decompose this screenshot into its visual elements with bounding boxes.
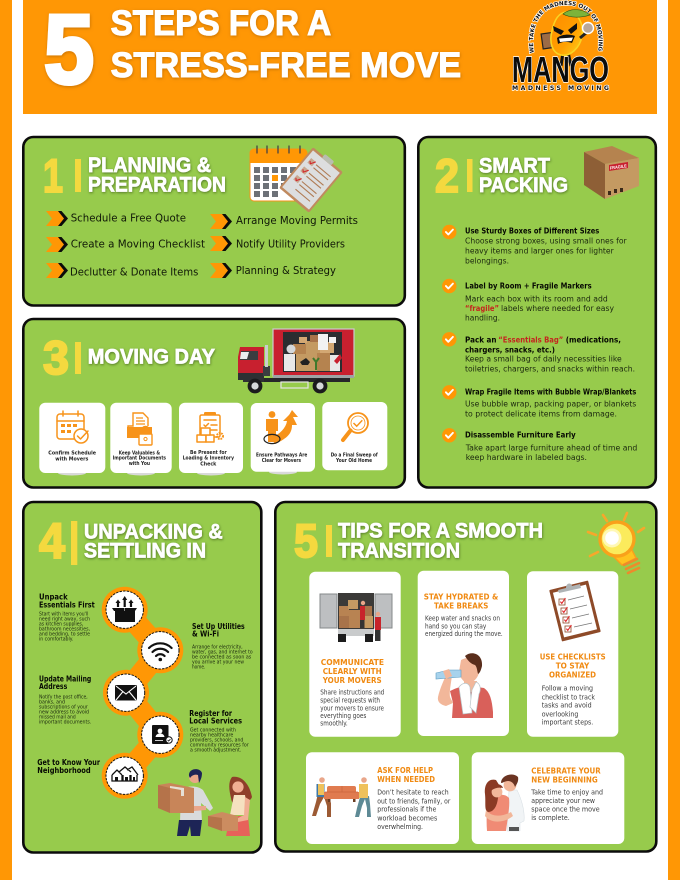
tip: sturdy boxes: Use Sturdy Boxes of Different Sizes — [465, 226, 600, 235]
card: keep valuables: Keep Valuables & — [119, 450, 160, 456]
tip: essentials bag: (medications, — [566, 336, 621, 345]
heading: SETTLING IN — [84, 540, 206, 563]
illustration: man drinking water — [436, 653, 493, 718]
card: ask for help: overwhelming. — [377, 823, 423, 831]
checklist right column: Arrange Moving Permits — [236, 215, 358, 227]
card: celebrate new beginning: appreciate your new — [531, 797, 595, 805]
tip: sturdy boxes: heavy items and larger ones for lighter — [465, 247, 614, 256]
card: stay hydrated: TAKE BREAKS — [434, 600, 488, 610]
card: celebrate new beginning — [472, 752, 624, 844]
heading: MOVING DAY — [88, 345, 215, 368]
text: unpack essentials first: in comfortably. — [39, 637, 74, 643]
text: register for local services — [189, 709, 250, 753]
heading: TIPS FOR A SMOOTH — [338, 520, 543, 543]
main title: STRESS-FREE MOVE — [111, 45, 461, 85]
illustration: hugging couple — [485, 775, 524, 831]
mascot face — [553, 23, 577, 35]
tip: label by room: “fragile” — [465, 304, 499, 313]
tip: label by room: labels where needed for easy — [501, 304, 614, 313]
tip: disassemble furniture — [442, 428, 637, 462]
icon: clipboard checklist — [279, 145, 345, 213]
card: ask for help — [306, 752, 459, 844]
card: be present for loading: Be Present for — [190, 450, 227, 456]
heading: TRANSITION — [338, 540, 460, 563]
tip: label by room: handling. — [465, 314, 500, 323]
card: ensure pathways: Clear for Movers — [262, 458, 302, 464]
mascot legs — [561, 52, 571, 66]
tip: essentials bag: chargers, snacks, etc.) — [465, 345, 555, 354]
text: unpack essentials first — [39, 593, 95, 643]
mascot body — [551, 12, 582, 55]
card: celebrate new beginning: CELEBRATE YOUR — [531, 766, 601, 776]
text: update mailing address: missed mail and — [39, 714, 76, 720]
step number 1 — [43, 149, 81, 202]
mascot fist — [580, 33, 586, 38]
card: communicate clearly: special requests with — [320, 696, 380, 704]
heading — [84, 520, 223, 563]
text: unpack essentials first: bathroom necessities, — [39, 626, 90, 632]
card: confirm schedule — [39, 403, 105, 476]
card: ensure pathways: Ensure Pathways Are — [256, 453, 307, 459]
text: register for local services: nearby healthcare — [190, 732, 233, 738]
tip: sturdy boxes: belongings. — [465, 256, 509, 265]
card: ask for help: workload becomes — [377, 814, 438, 822]
main title — [111, 3, 461, 85]
heading — [338, 520, 543, 563]
text: register for local services: Register for — [189, 709, 232, 718]
card: ask for help: ASK FOR HELP — [377, 765, 433, 775]
icon: fragile cardboard box — [584, 146, 639, 199]
step number 4: 4 — [39, 513, 65, 569]
panel 3: moving day — [23, 319, 405, 488]
card: use checklists — [527, 571, 618, 737]
tip: disassemble furniture: Take apart large furniture ahead of time and — [465, 443, 637, 452]
icon: light bulb — [588, 513, 644, 573]
illustration: truck rear with movers — [320, 593, 392, 642]
text: get to know your neighborhood: Neighborhood — [37, 766, 91, 775]
text: update mailing address: Address — [39, 682, 67, 691]
text: set up utilities: home. — [192, 665, 206, 671]
tip: essentials bag: Pack an — [465, 336, 496, 345]
step number 1: 1 — [43, 149, 63, 202]
text: update mailing address: banks, and — [39, 699, 65, 705]
card: ask for help: out to friends, family, or — [377, 797, 450, 805]
card: communicate clearly: smoothly. — [320, 720, 348, 728]
text: update mailing address: subscriptions of your — [39, 704, 89, 710]
main title: STEPS FOR A — [111, 3, 331, 43]
checklist left column — [46, 211, 205, 279]
card: use checklists: TO STAY — [556, 660, 590, 670]
icon: unpack box — [106, 591, 143, 628]
logo wordmark: MANGO — [512, 49, 609, 90]
card: use checklists: ORGANIZED — [549, 669, 596, 679]
card: final sweep: Do a Final Sweep of — [331, 453, 378, 459]
text: set up utilities: Arrange for electricity, — [192, 644, 243, 650]
card: celebrate new beginning: is complete. — [531, 814, 570, 822]
card: communicate clearly: YOUR MOVERS — [322, 675, 382, 685]
icon: neighborhood houses — [106, 757, 143, 794]
logo: Mango Madness Moving — [512, 0, 610, 92]
tip: disassemble furniture: keep hardware in labeled bags. — [466, 453, 587, 462]
card: confirm schedule: Confirm Schedule — [48, 451, 96, 457]
logo subtitle: MADNESS MOVING — [512, 85, 609, 92]
heading: UNPACKING & — [84, 520, 223, 543]
card: communicate clearly: your movers to ensure — [320, 704, 384, 712]
card: ask for help: Don’t hesitate to reach — [377, 789, 449, 797]
card: be present for loading — [179, 403, 243, 476]
step number 2 — [435, 149, 472, 202]
text: set up utilities: be connected as soon as — [192, 654, 252, 660]
heading — [88, 154, 226, 197]
checklist right column — [210, 214, 358, 278]
illustration: two people carrying a sofa — [312, 777, 371, 817]
tip: label by room: Label by Room + Fragile Markers — [465, 281, 592, 290]
card: confirm schedule: with Movers — [55, 457, 89, 463]
illustration: moving truck — [238, 329, 354, 393]
heading: PREPARATION — [88, 174, 226, 197]
text: set up utilities: water, gas, and internet to — [192, 649, 253, 655]
card: communicate clearly: Share instructions and — [320, 689, 384, 697]
card: final sweep: Your Old Home — [335, 458, 372, 464]
text: update mailing address: new address to avoid — [39, 709, 89, 715]
card: celebrate new beginning: Take time to enjoy and — [530, 788, 603, 796]
orange timeline chain — [102, 587, 183, 799]
heading: PACKING — [479, 174, 568, 197]
step number 2: 2 — [435, 149, 459, 202]
text: update mailing address: important documents. — [39, 720, 92, 726]
card: communicate clearly: COMMUNICATE — [321, 657, 384, 667]
card: final sweep — [322, 402, 387, 470]
card: communicate clearly — [309, 572, 401, 737]
icon: envelope — [107, 674, 145, 711]
card: stay hydrated: energized during the move. — [425, 630, 503, 638]
card: celebrate new beginning: space once the move — [531, 805, 600, 813]
card: be present for loading: Loading & Inventory — [183, 456, 234, 462]
tip: essentials bag: toiletries, chargers, and snacks within reach. — [465, 364, 635, 373]
card: use checklists: important steps. — [542, 719, 593, 727]
card: communicate clearly: everything goes — [320, 712, 367, 720]
text: unpack essentials first: Essentials First — [39, 600, 95, 609]
tip: sturdy boxes — [442, 225, 627, 265]
tip: label by room: Mark each box with its room and add — [465, 294, 608, 303]
icon: calendar — [250, 146, 307, 201]
tip: disassemble furniture: Disassemble Furniture Early — [465, 431, 576, 440]
text: unpack essentials first: as kitchen supplies, — [39, 621, 84, 627]
text: register for local services: Get connected with — [190, 727, 236, 733]
card: be present for loading: Check — [200, 462, 217, 468]
icon: fragile cardboard box: FRAGILE — [610, 163, 627, 171]
panel 4: unpacking and settling in — [23, 502, 261, 852]
text: set up utilities: Set Up Utilities — [192, 622, 245, 631]
illustration: clipboard with ticks — [549, 580, 601, 642]
panel 5: tips for a smooth transition — [275, 502, 656, 852]
checklist left column: Declutter & Donate Items — [70, 267, 198, 279]
card: stay hydrated: hand so you can stay — [425, 622, 486, 630]
tip: label by room — [442, 279, 614, 323]
heading: PLANNING & — [88, 154, 211, 177]
panel 2: smart packing — [418, 137, 656, 488]
text: get to know your neighborhood — [37, 758, 100, 775]
step number 5: 5 — [294, 514, 318, 567]
heading — [479, 155, 568, 197]
card: ask for help: professionals if the — [377, 806, 436, 814]
panel 1: planning and preparation — [23, 137, 405, 306]
text: get to know your neighborhood: Get to Know Your — [37, 758, 100, 767]
card: keep valuables: with You — [129, 461, 150, 467]
text: set up utilities — [192, 622, 253, 671]
heading: SMART — [479, 155, 550, 178]
card: ensure pathways — [251, 403, 315, 474]
card: ask for help: WHEN NEEDED — [377, 774, 435, 784]
text: set up utilities: you arrive at your new — [192, 659, 244, 665]
card: stay hydrated — [418, 571, 509, 736]
text: update mailing address — [39, 675, 92, 726]
text: update mailing address: Update Mailing — [39, 675, 92, 684]
illustration: couple carrying boxes — [158, 769, 252, 836]
card: use checklists: USE CHECKLISTS — [540, 651, 606, 661]
tip: wrap fragile items — [442, 385, 637, 418]
mascot leaf — [563, 10, 590, 17]
mascot box — [541, 32, 557, 49]
header banner — [23, 0, 657, 114]
step number 5 — [294, 514, 332, 567]
checklist right column: Planning & Strategy — [236, 265, 336, 277]
tip: sturdy boxes: Choose strong boxes, using small ones for — [465, 237, 627, 246]
card: keep valuables — [110, 403, 172, 476]
text: register for local services: community resources for — [190, 742, 250, 748]
icon: wi-fi — [142, 632, 179, 669]
card: use checklists: overlooking — [542, 710, 578, 718]
text: update mailing address: Notify the post office, — [39, 694, 88, 700]
tip: essentials bag: Keep a small bag of daily necessities like — [465, 355, 622, 364]
text: register for local services: a smooth adjustment. — [190, 747, 242, 753]
text: unpack essentials first: and bedding, to settle — [39, 631, 90, 637]
text: register for local services: Local Services — [189, 717, 242, 726]
text: unpack essentials first: Start with items you'll — [39, 611, 88, 617]
card: keep valuables: Important Documents — [113, 456, 167, 462]
tip: wrap fragile items: Wrap Fragile Items with Bubble Wrap/Blankets — [465, 388, 637, 397]
card: use checklists: checklist to track — [542, 693, 595, 701]
text: register for local services: providers, schools, and — [190, 737, 243, 743]
logo: Mango Madness Moving: WE TAKE THE MADNESS OUT OF MOVING — [528, 0, 604, 54]
step number 3: 3 — [43, 331, 69, 384]
truck cab — [238, 347, 264, 373]
card: communicate clearly: CLEARLY WITH — [323, 666, 382, 676]
text: set up utilities: & Wi-Fi — [192, 630, 219, 639]
card: use checklists: Follow a moving — [542, 685, 593, 693]
card: use checklists: tasks and avoid — [542, 702, 592, 710]
card: stay hydrated: Keep water and snacks on — [425, 615, 500, 623]
tip: wrap fragile items: Use bubble wrap, packing paper, or blankets — [465, 399, 636, 408]
card: celebrate new beginning: NEW BEGINNING — [531, 774, 598, 784]
checklist left column: Create a Moving Checklist — [71, 239, 205, 251]
tip: essentials bag: “Essentials Bag” — [498, 336, 563, 345]
truck wheels — [248, 379, 327, 393]
tip: wrap fragile items: to protect delicate items from damage. — [465, 409, 617, 418]
checklist left column: Schedule a Free Quote — [71, 213, 186, 225]
icon: local services id card — [142, 716, 179, 753]
text: unpack essentials first: Unpack — [39, 593, 68, 602]
checklist right column: Notify Utility Providers — [236, 239, 345, 251]
tip: essentials bag — [442, 332, 635, 373]
text: unpack essentials first: need right away, such — [39, 616, 90, 622]
step number 3 — [43, 331, 81, 384]
card: stay hydrated: STAY HYDRATED & — [424, 591, 498, 601]
